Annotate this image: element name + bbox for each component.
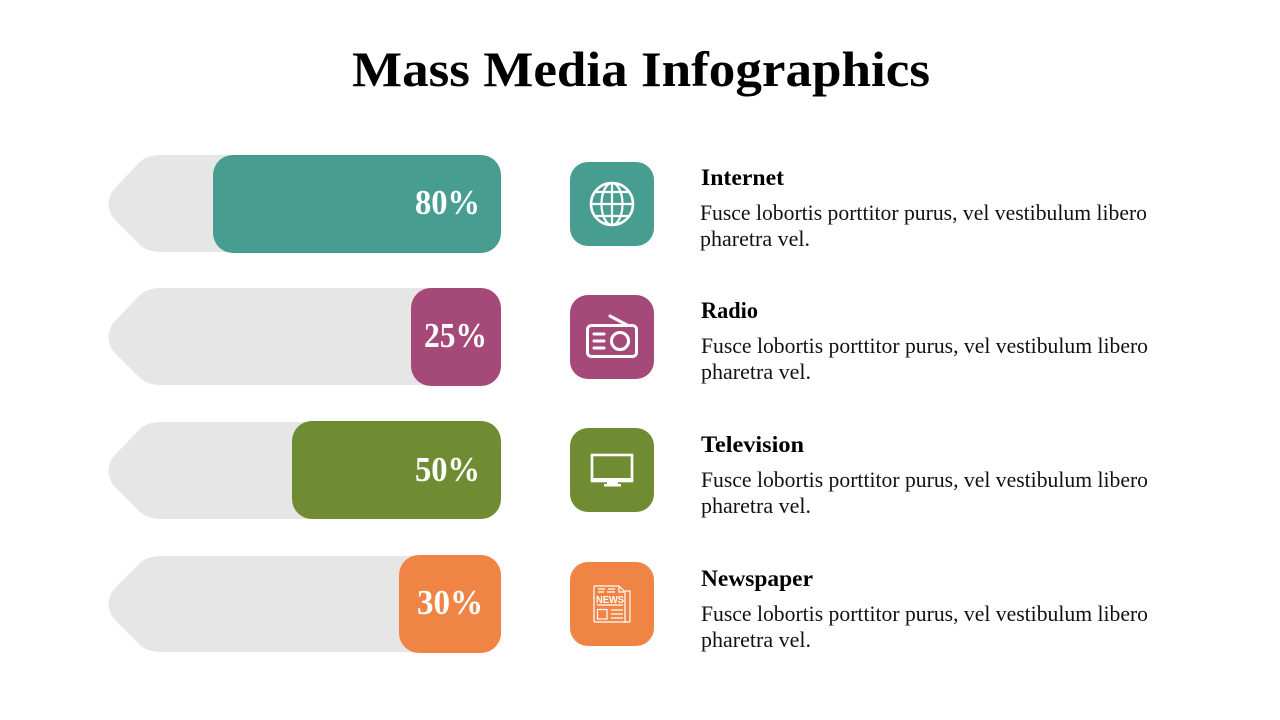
bar track: newspaper <box>108 556 480 652</box>
value: 50%: 50% <box>415 450 480 489</box>
heading: newspaper: Newspaper <box>701 566 813 591</box>
text: radio description: Fusce lobortis porttitor purus, vel vestibulum libero <box>701 333 1148 358</box>
bar fill: television 50% <box>292 421 501 519</box>
bar fill: internet 80% <box>213 155 501 253</box>
icon: newspaper: NEWS <box>596 595 624 606</box>
heading: radio: Radio <box>701 298 758 323</box>
text: internet description: Fusce lobortis porttitor purus, vel vestibulum libero <box>700 200 1147 225</box>
row: television <box>108 421 1148 519</box>
icon: newspaper <box>570 562 654 646</box>
icon: television <box>570 428 654 512</box>
bar fill: newspaper 30% <box>399 555 501 653</box>
text: television description: Fusce lobortis porttitor purus, vel vestibulum libero <box>701 467 1148 492</box>
text: newspaper description: Fusce lobortis porttitor purus, vel vestibulum libero <box>701 601 1148 626</box>
row: radio <box>108 288 1148 386</box>
icon: globe <box>570 162 654 246</box>
row: internet <box>108 155 1147 253</box>
bar track: television <box>108 422 480 519</box>
heading: television: Television <box>701 432 804 457</box>
text: television description: pharetra vel. <box>701 493 811 518</box>
value: 25%: 25% <box>424 316 487 355</box>
icon: radio <box>570 295 654 379</box>
bar track: radio <box>108 288 480 385</box>
text: newspaper description: pharetra vel. <box>701 627 811 652</box>
row: newspaper <box>108 555 1148 653</box>
value: 30%: 30% <box>417 583 483 622</box>
text: radio description: pharetra vel. <box>701 359 811 384</box>
heading: internet: Internet <box>701 165 784 190</box>
bar fill: radio 25% <box>411 288 501 386</box>
title: Mass Media Infographics <box>352 41 930 97</box>
text: internet description: pharetra vel. <box>700 226 810 251</box>
value: 80%: 80% <box>415 183 480 222</box>
bar track: internet <box>108 155 480 252</box>
